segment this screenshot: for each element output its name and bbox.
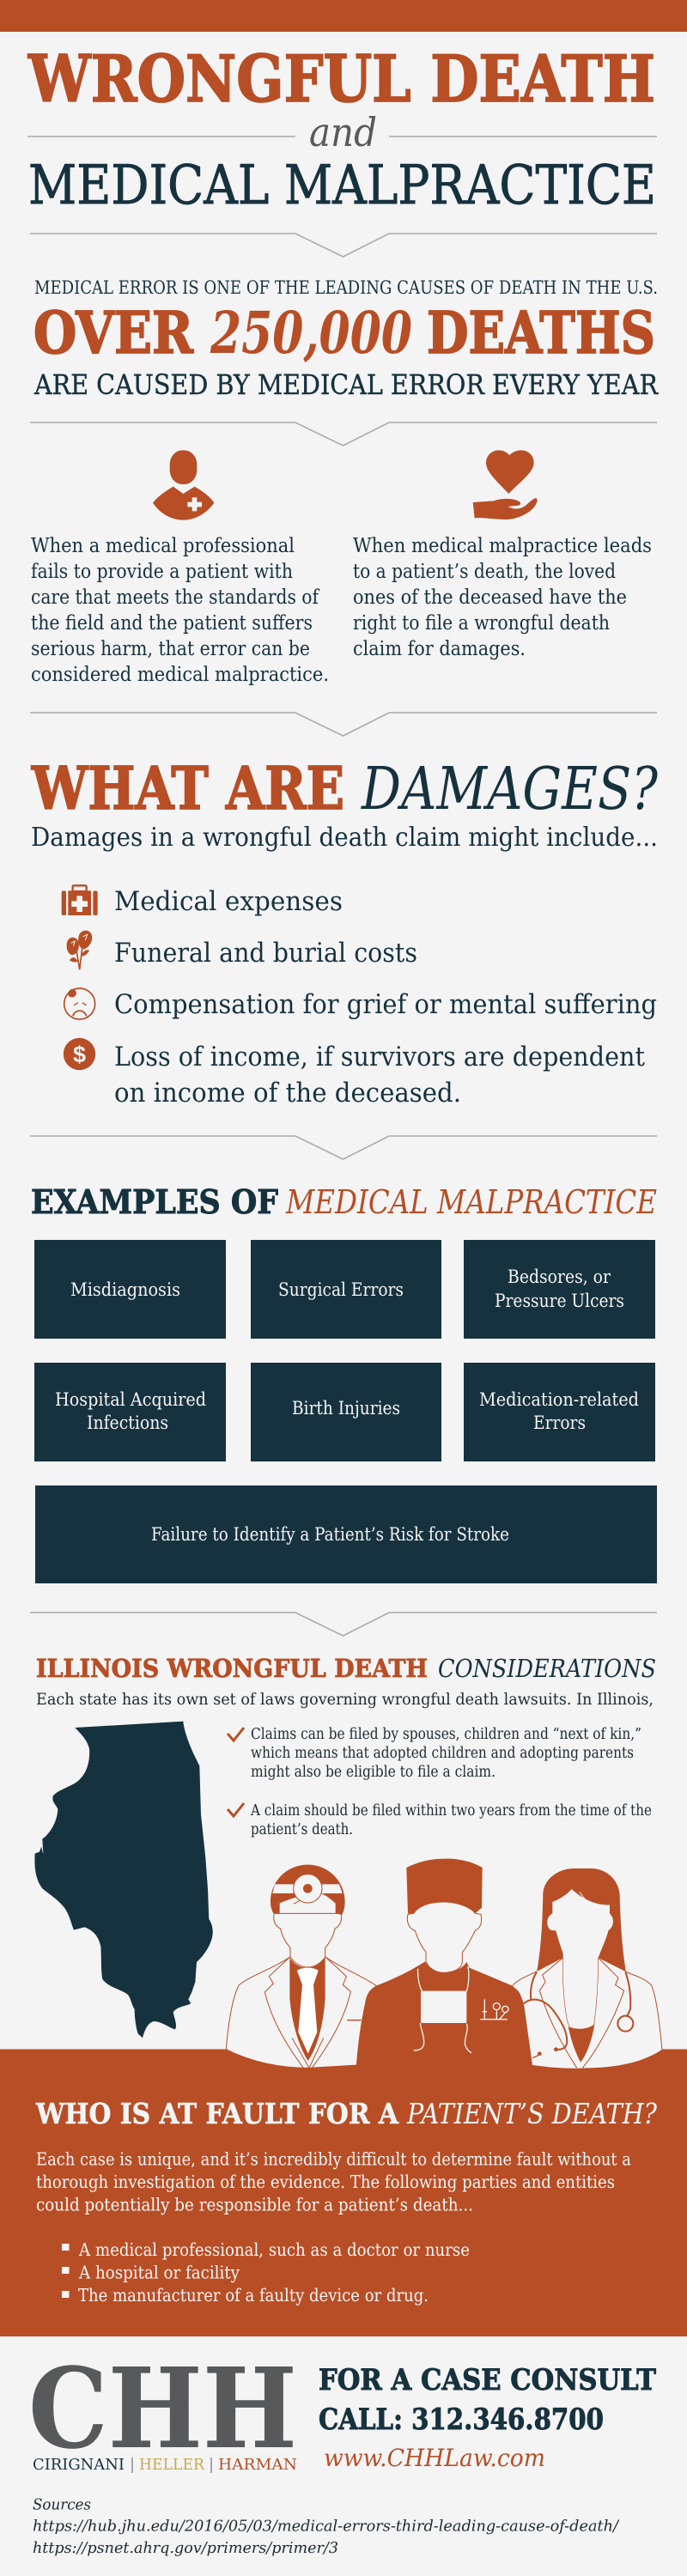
box: surgical errors [251,1240,441,1339]
icon: doctor with cross [153,450,214,520]
heading: illinois considerations: CONSIDERATIONS [438,1654,656,1683]
illinois intro: Each state has its own set of laws governing wrongful death lawsuits. In Illinois, [36,1690,654,1709]
icon: dollar: $ [73,1042,86,1067]
damage item: funeral: Funeral and burial costs [114,938,417,969]
damage item: loss of income: on income of the deceased. [114,1078,461,1109]
paragraph: fault [36,2148,631,2215]
icon: heart in hand [473,450,538,519]
heading: examples of medical malpractice [31,1182,657,1221]
divider arrow 5 [30,1613,657,1636]
box: medication errors: Errors [533,1413,586,1434]
icon: dollar [64,1038,95,1070]
box: hospital acquired infections: Hospital Acquired [55,1389,206,1411]
divider arrow 2 [30,422,657,446]
box: bedsores: Pressure Ulcers [495,1291,624,1312]
damage item: loss of income [114,1042,645,1109]
heading: examples of medical malpractice: EXAMPLES OF [31,1182,278,1221]
text block: right to file: ones of the deceased have the [353,586,627,609]
text block: right to file [353,535,652,660]
box: medication errors: Medication-related [479,1389,639,1411]
text block: right to file: When medical malpractice leads [353,535,652,557]
logo: CHH: HELLER [139,2456,204,2474]
box: birth injuries: Birth Injuries [292,1398,400,1419]
damage item: loss of income: Loss of income, if survivors are dependent [114,1042,645,1072]
contact heading: FOR A CASE CONSULT [319,2363,656,2397]
box: bedsores: Bedsores, or [508,1267,611,1288]
bullet list: responsible parties: The manufacturer of a faulty device or drug. [78,2285,429,2306]
heading: who is at fault: WHO IS AT FAULT FOR A [35,2097,398,2130]
checklist item: time limit [228,1802,652,1838]
text block: definition of malpractice: serious harm, that error can be [31,638,310,660]
heading: patient's death: PATIENT’S DEATH? [406,2097,657,2130]
heading: what are damages [31,755,658,823]
panel: who is at fault [35,2097,657,2306]
sources [33,2495,620,2557]
text block: definition of malpractice: care that meets the standards of [31,586,319,609]
title line: and: and [309,109,377,155]
statistic block [33,277,659,401]
heading: illinois considerations: ILLINOIS WRONGFUL DEATH [36,1654,428,1683]
icon: sad face [64,988,95,1019]
sources: Sources [33,2495,91,2514]
checklist item: who can file: Claims can be filed by spouses, children and “next of kin,” [251,1726,641,1743]
website: www.CHHLaw.com [324,2444,545,2472]
list of damages [62,885,657,1109]
damage item: compensation: Compensation for grief or mental suffering [114,989,657,1020]
divider arrow 1 [30,234,657,257]
checklist item: who can file [228,1726,641,1781]
box: misdiagnosis: Misdiagnosis [70,1279,180,1301]
top bar [0,0,687,32]
example boxes [34,1240,657,1583]
sources: https://hub.jhu.edu/2016/05/03/medical-errors-third-leading-cause-of-death/ [33,2518,620,2535]
box: bedsores [464,1240,655,1339]
icon: medical kit [62,885,98,915]
heading: illinois considerations [36,1654,656,1683]
paragraph: fault: thorough investigation of the evidence. The following parties and entities [36,2172,615,2192]
damage item: medical expenses: Medical expenses [114,886,343,917]
box: hospital acquired infections: Infections [87,1413,168,1434]
checklist item: time limit: patient’s death. [251,1821,353,1838]
divider arrow 4 [30,1136,657,1159]
figure: surgeon [356,1859,532,2072]
text block: right to file: to a patient’s death, the loved [353,561,616,583]
text block: definition of malpractice: When a medical professional [31,535,295,557]
statistic: over: OVER [33,299,194,367]
logo: CHH: HARMAN [218,2456,297,2474]
box: surgical errors: Surgical Errors [278,1279,404,1301]
illustration: medical staff [226,1859,662,2072]
text block: definition of malpractice: fails to provide a patient with [31,561,293,583]
checklist item: who can file: which means that adopted children and adopting parents [251,1745,634,1762]
box: medication errors [464,1363,655,1461]
figure: doctor [226,1865,376,2068]
box: hospital acquired infections [34,1363,226,1461]
map: illinois [34,1722,213,2038]
text block: right to file: right to file a wrongful death [353,612,610,635]
text block: definition of malpractice: the field and the patient suffers [31,612,313,635]
statistic: 250,000: 250,000 [210,299,412,367]
heading: what are damages: WHAT ARE [31,755,344,823]
text block: definition of malpractice: considered medical malpractice. [31,664,329,686]
orange panel background [0,2049,687,2336]
divider arrow 3 [30,713,657,736]
sources: https://psnet.ahrq.gov/primers/primer/3 [33,2539,338,2557]
box: stroke risk [35,1485,657,1583]
paragraph: fault: could potentially be responsible for a patient’s death... [36,2195,473,2215]
text block: right to file: claim for damages. [353,638,526,660]
checklist item: who can file: might also be eligible to file a claim. [251,1764,495,1781]
logo: CHH: CHH [28,2344,297,2474]
figure: nurse [513,1868,662,2069]
bullet list: responsible parties: A hospital or facility [78,2262,240,2282]
phone number: CALL: 312.346.8700 [319,2403,604,2437]
icon: roses [67,931,92,969]
bullet list: responsible parties: A medical professional, such as a doctor or nurse [78,2239,470,2260]
text block: definition of malpractice [31,535,329,686]
title [27,41,657,216]
box: birth injuries [251,1363,441,1461]
box: misdiagnosis [34,1240,226,1339]
box: stroke risk: Failure to Identify a Patient’s Risk for Stroke [151,1524,509,1546]
contact block [319,2363,656,2472]
logo: CHH: CIRIGNANI [33,2456,125,2474]
bullet list: responsible parties [62,2239,470,2306]
